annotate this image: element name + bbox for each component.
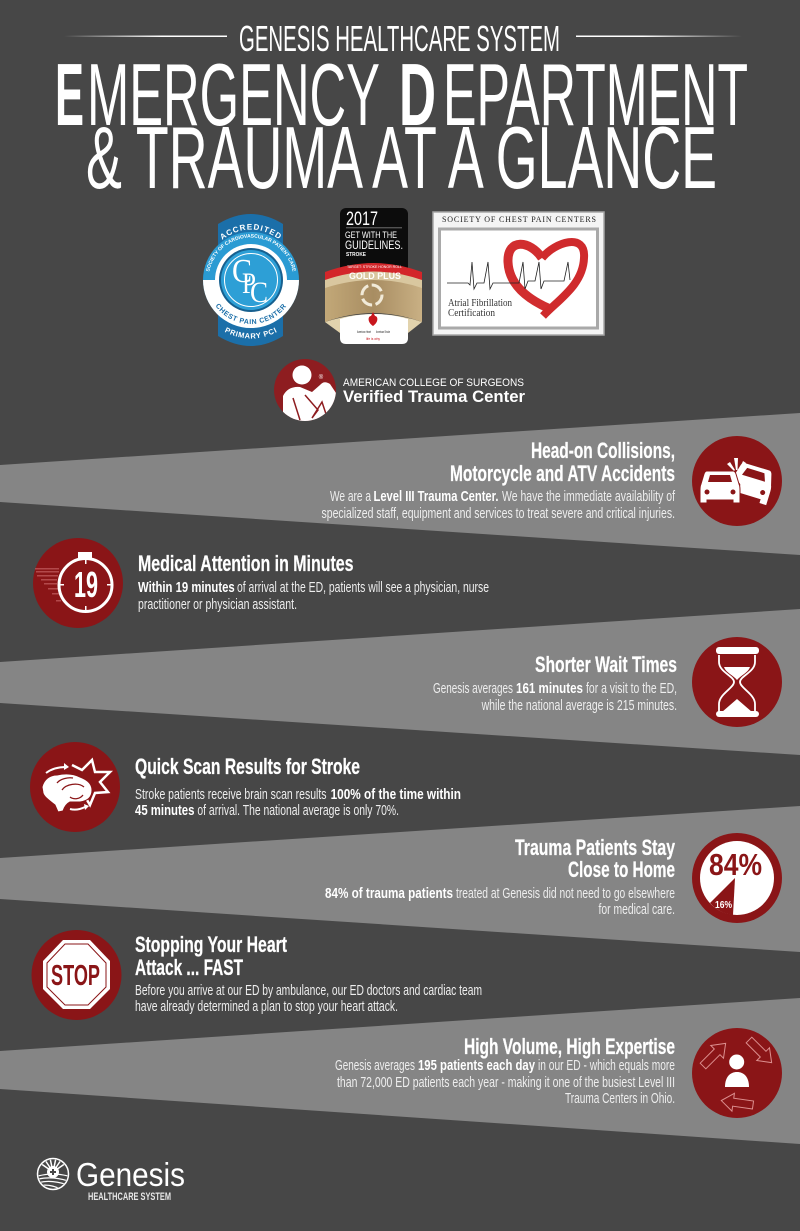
badge: get with the guidelines: TARGET: STROKE HONOR ROLL [347,264,403,269]
body text: 195 patients each day [418,1057,535,1074]
body text: Genesis averages [335,1057,415,1074]
icon: 84 percent pie: 84% [709,847,762,882]
logo: genesis healthcare system: Genesis [76,1156,185,1193]
icon: stop sign [32,930,122,1020]
band: trauma patients [0,806,800,952]
icon: 84 percent pie: 16% [715,900,732,911]
body text [135,786,461,819]
title [55,45,748,207]
badge: accredited chest pain center: CHEST PAIN CENTER [216,304,286,324]
badge: atrial fibrillation certification: Atrial Fibrillation [448,298,512,309]
header rule left [64,36,227,37]
body text: have already determined a plan to stop your heart attack. [135,998,398,1015]
heading: Head-on Collisions, [531,438,675,463]
badge: accredited chest pain center: ACCREDITED [221,224,281,240]
body text [135,982,482,1015]
body text: of arrival at the ED, patients will see a physician, nurse [237,579,489,596]
body text: Within 19 minutes [138,579,235,596]
panel: trauma patients stay close to home [325,833,782,923]
heading: Close to Home [568,857,675,882]
body text [335,1057,675,1107]
body text [433,680,677,714]
badge: accredited chest pain center: PRIMARY PCI [224,327,277,339]
body text: treated at Genesis did not need to go elsewhere [456,885,675,902]
badge: atrial fibrillation certification: Certification [448,308,495,319]
logo: genesis healthcare system [38,1156,185,1203]
body text: 100% of the time within [331,786,461,803]
icon: person with arrows [692,1028,782,1118]
body text: Before you arrive at our ED by ambulance, our ED doctors and cardiac team [135,982,482,999]
icon: 84 percent pie [692,833,782,923]
body text [325,885,675,918]
body text: 84% of trauma patients [325,885,453,902]
header rule right [576,36,742,37]
heading [450,438,675,486]
badge: accredited chest pain center [203,214,299,346]
title: E [55,45,84,144]
body text: 45 minutes [135,802,194,819]
band: high volume [0,998,800,1144]
heading: Medical Attention in Minutes [138,551,354,576]
badge: accredited chest pain center: SOCIETY OF CARDIOVASCULAR PATIENT CARE [206,234,296,272]
badge: get with the guidelines: life is why [366,337,380,341]
heading: Quick Scan Results for Stroke [135,754,360,779]
heading: Trauma Patients Stay [515,835,676,860]
body text [322,488,676,522]
title: D [399,45,436,144]
body text: Level III Trauma Center. [374,488,498,505]
badge: get with the guidelines: GET WITH THE [345,230,397,240]
body text: Genesis averages [433,680,513,697]
panel: head-on collisions [322,436,782,526]
badge: get with the guidelines: STROKE [346,252,367,258]
logo: genesis healthcare system: HEALTHCARE SYSTEM [88,1191,171,1203]
badge: atrial fibrillation certification: SOCIETY OF CHEST PAIN CENTERS [442,215,596,224]
body text: practitioner or physician assistant. [138,596,297,613]
icon: stopwatch 19: 19 [74,564,98,605]
badge: atrial fibrillation certification [433,212,604,335]
body text: Stroke patients receive brain scan results [135,786,326,803]
panel: medical attention in minutes [33,538,489,628]
body text: for medical care. [598,901,675,918]
badge: get with the guidelines: GOLD PLUS [349,271,401,281]
badge: accredited chest pain center: P [242,267,256,300]
icon: hourglass [692,637,782,727]
heading [515,835,676,882]
badge: accredited chest pain center: C [250,276,268,309]
heading: Motorcycle and ATV Accidents [450,461,675,486]
body text: in our ED - which equals more [538,1057,675,1074]
panel: quick scan results [30,742,461,832]
body text: 161 minutes [516,680,583,697]
icon: crashing cars [692,436,782,526]
icon: brain with burst [30,742,120,832]
title: MERGENCY [87,45,380,144]
badge: get with the guidelines: GUIDELINES. [345,238,403,252]
heading: Shorter Wait Times [535,652,677,677]
icon: genesis sun and fields [38,1158,68,1190]
heading [135,932,287,980]
band: collisions [0,413,800,555]
heading: Attack ... FAST [135,955,243,980]
badge: get with the guidelines: American Heart [357,330,371,334]
badge: get with the guidelines [325,208,422,344]
badge: accredited chest pain center: C [232,253,252,290]
badge: verified trauma center: ® [319,374,324,381]
icon: stopwatch 19 [33,538,123,628]
badge: get with the guidelines: 2017 [346,209,378,230]
body text: while the national average is 215 minutes. [481,697,677,714]
badge: get with the guidelines: American Stroke [376,330,390,334]
body text: for a visit to the ED, [586,680,677,697]
body text: We are a [330,488,371,505]
heading: High Volume, High Expertise [464,1034,675,1059]
body text: Trauma Centers in Ohio. [565,1090,675,1107]
eyebrow heading: GENESIS HEALTHCARE SYSTEM [239,18,560,59]
badge: verified trauma center [274,359,525,425]
band: wait times [0,609,800,755]
icon: stop sign: STOP [51,960,100,992]
heading: Stopping Your Heart [135,932,287,957]
badge: verified trauma center: Verified Trauma Center [343,387,525,406]
badge: verified trauma center: AMERICAN COLLEGE OF SURGEONS [343,377,524,389]
panel: stopping your heart attack [32,930,482,1020]
body text: We have the immediate availability of [502,488,676,505]
body text [138,579,489,613]
panel: high volume high expertise [335,1028,782,1118]
body text: of arrival. The national average is only 70%. [197,802,399,819]
panel: shorter wait times [433,637,782,727]
